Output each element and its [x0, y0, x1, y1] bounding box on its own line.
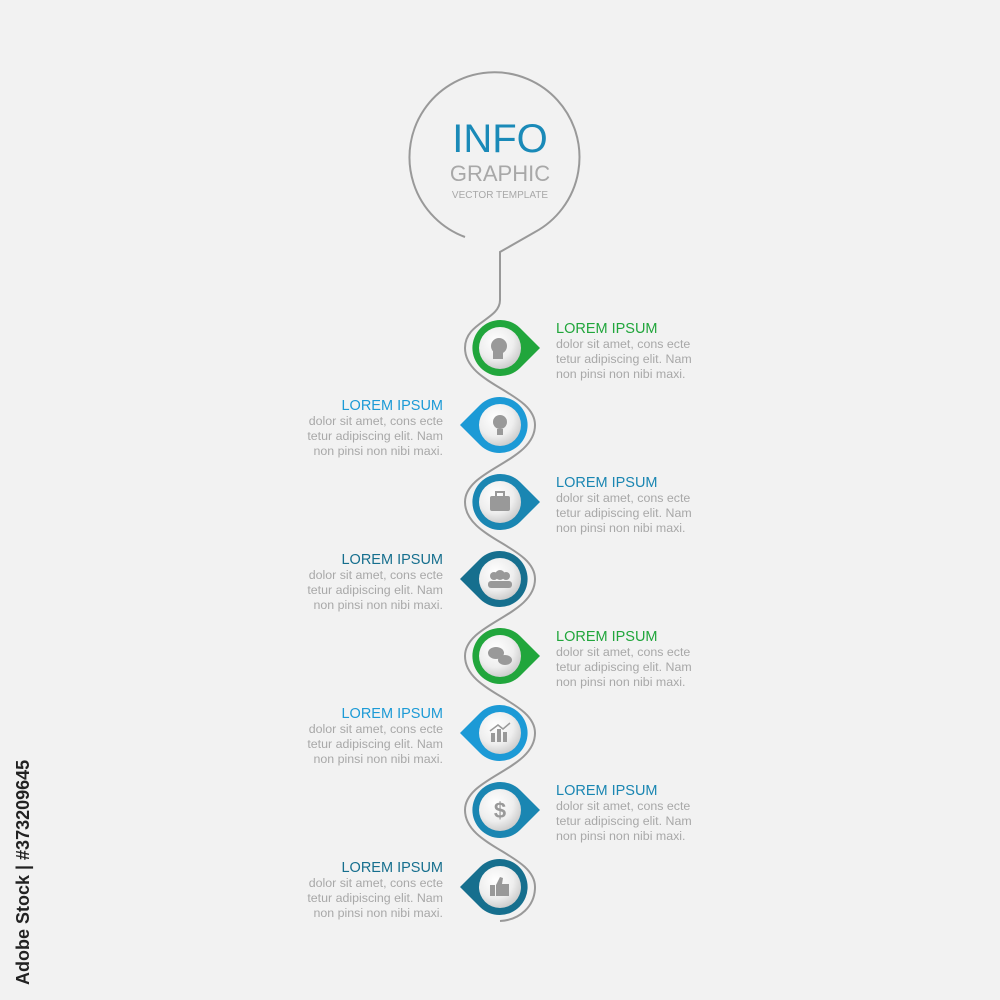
text 6: dolor sit amet, cons ecte [309, 722, 443, 736]
text 8: tetur adipiscing elit. Nam [307, 891, 443, 905]
text 7: non pinsi non nibi maxi. [556, 829, 686, 843]
text 7: dolor sit amet, cons ecte [556, 799, 690, 813]
step 2 [460, 397, 528, 453]
text 6 [307, 706, 443, 766]
icon: briefcase [490, 492, 510, 511]
step 4 [460, 551, 528, 607]
text 7: LOREM IPSUM [556, 783, 658, 799]
text 5: tetur adipiscing elit. Nam [556, 660, 692, 674]
text 3: LOREM IPSUM [556, 475, 658, 491]
text 4: tetur adipiscing elit. Nam [307, 583, 443, 597]
text 8: dolor sit amet, cons ecte [309, 876, 443, 890]
text 6: non pinsi non nibi maxi. [314, 752, 443, 766]
text 1 [556, 321, 692, 381]
text 2: LOREM IPSUM [341, 398, 443, 414]
text 8 [307, 860, 443, 920]
text 6: tetur adipiscing elit. Nam [307, 737, 443, 751]
text 4: non pinsi non nibi maxi. [314, 598, 443, 612]
text 5 [556, 629, 692, 689]
step 3 [472, 474, 540, 530]
text 2 [307, 398, 443, 458]
text 3: non pinsi non nibi maxi. [556, 521, 686, 535]
step 6 [460, 705, 528, 761]
text 1: dolor sit amet, cons ecte [556, 337, 690, 351]
text 2: tetur adipiscing elit. Nam [307, 429, 443, 443]
text 2: non pinsi non nibi maxi. [314, 444, 443, 458]
icon: bulb [493, 415, 507, 435]
side id text: Adobe Stock | #373209645 [13, 760, 33, 985]
connector line [409, 72, 579, 921]
step 1 [472, 320, 540, 376]
text 1: tetur adipiscing elit. Nam [556, 352, 692, 366]
icon: people [488, 570, 512, 588]
text 4 [307, 552, 443, 612]
title [450, 117, 550, 201]
icon: chart [490, 723, 510, 742]
text 7: tetur adipiscing elit. Nam [556, 814, 692, 828]
text 1: LOREM IPSUM [556, 321, 658, 337]
text 3 [556, 475, 692, 535]
text 5: dolor sit amet, cons ecte [556, 645, 690, 659]
text 4: LOREM IPSUM [341, 552, 443, 568]
text 8: LOREM IPSUM [341, 860, 443, 876]
icon: chat [488, 647, 512, 665]
text 7 [556, 783, 692, 843]
title: GRAPHIC [450, 161, 550, 186]
icon: head gears [491, 338, 507, 359]
icon: dollar: $ [494, 798, 506, 823]
step 8 [460, 859, 528, 915]
text 1: non pinsi non nibi maxi. [556, 367, 686, 381]
step 5 [472, 628, 540, 684]
title: INFO [452, 117, 548, 161]
text 3: dolor sit amet, cons ecte [556, 491, 690, 505]
text 5: LOREM IPSUM [556, 629, 658, 645]
text 8: non pinsi non nibi maxi. [314, 906, 443, 920]
text 6: LOREM IPSUM [341, 706, 443, 722]
text 3: tetur adipiscing elit. Nam [556, 506, 692, 520]
title: VECTOR TEMPLATE [452, 190, 548, 201]
text 4: dolor sit amet, cons ecte [309, 568, 443, 582]
text 5: non pinsi non nibi maxi. [556, 675, 686, 689]
text 2: dolor sit amet, cons ecte [309, 414, 443, 428]
icon: thumbs up [490, 877, 509, 896]
step 7 [472, 782, 540, 838]
